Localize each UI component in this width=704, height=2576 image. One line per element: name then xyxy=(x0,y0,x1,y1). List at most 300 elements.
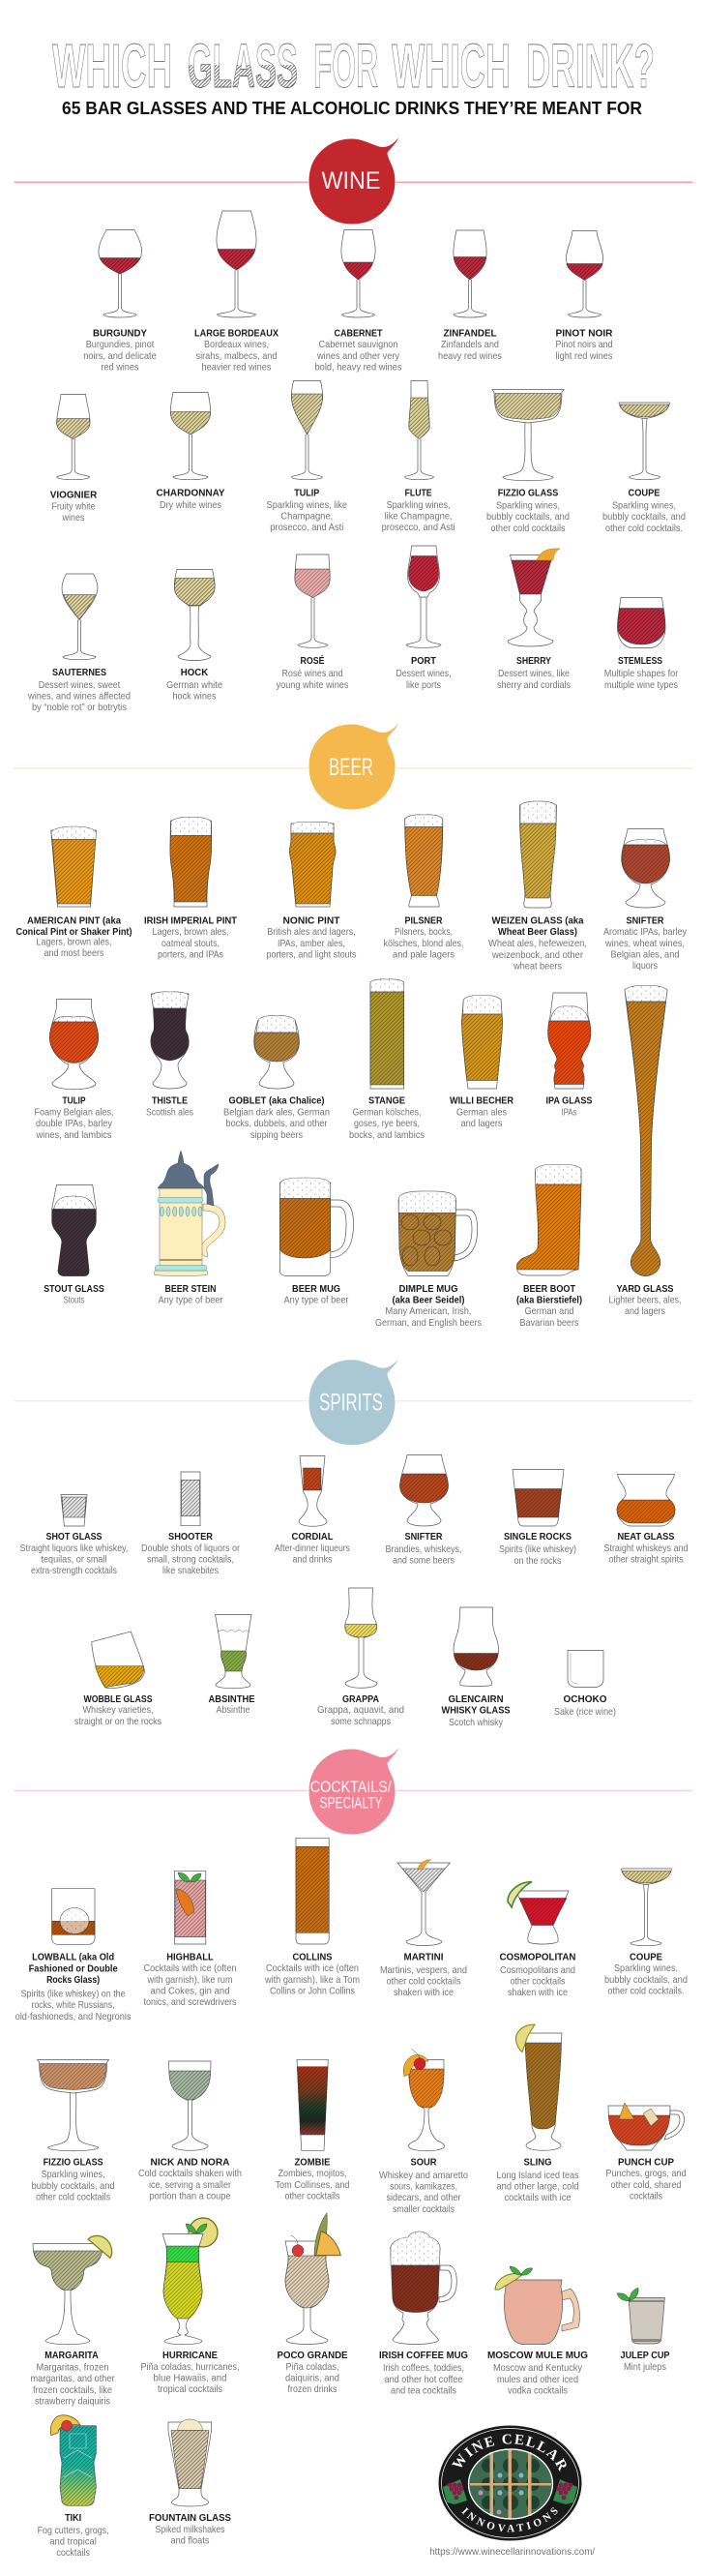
label: absinthe: Absinthe xyxy=(217,1704,250,1716)
label: ochoko: Sake (rice wine) xyxy=(554,1706,616,1718)
label: irish coffee: and other hot coffee xyxy=(385,2374,463,2385)
icon: lowball xyxy=(52,1889,95,1944)
label: snifter spirits: SNIFTER xyxy=(404,1531,443,1543)
label: american pint: Lagers, brown ales, xyxy=(37,937,112,948)
icon: nonic pint xyxy=(290,822,336,907)
label: port: PORT xyxy=(411,655,437,667)
label: viognier: wines xyxy=(62,512,85,524)
label: pinot noir: PINOT NOIR xyxy=(555,327,613,339)
label: goblet xyxy=(223,1095,330,1141)
label: collins: with garnish), like a Tom xyxy=(264,1974,360,1986)
label: fizzio: Sparkling wines, xyxy=(496,499,560,511)
label: glencairn xyxy=(441,1693,511,1728)
label: nonic pint: British ales and lagers, xyxy=(267,926,356,938)
label: stemless: multiple wine types xyxy=(604,679,678,691)
label: willi becher: German ales xyxy=(456,1107,507,1119)
icon: tiki xyxy=(50,2415,96,2505)
label: yard glass: and lagers xyxy=(625,1305,665,1317)
label: fizzio: bubbly cocktails, and xyxy=(486,511,570,523)
title: WHICH xyxy=(392,31,511,101)
logo: wine cellar innovations xyxy=(439,2425,582,2541)
url: https://www.winecellarinnovations.com/ xyxy=(429,2546,595,2558)
label: margarita: frozen cocktails, like xyxy=(33,2384,112,2396)
label: irish imperial pint: porters, and IPAs xyxy=(158,948,223,960)
label: pilsner: kölsches, blond ales, xyxy=(383,938,464,949)
glass card: tulip wine xyxy=(267,381,347,533)
label: snifter spirits: Brandies, whiskeys, xyxy=(385,1543,462,1555)
label: collins: Cocktails with ice (often xyxy=(266,1962,359,1974)
glass card: yard glass xyxy=(609,985,681,1317)
label: stemless xyxy=(604,655,679,691)
label: zinfandel: Zinfandels and xyxy=(441,339,499,350)
label: hock: German white xyxy=(166,679,222,691)
glass card: single rocks xyxy=(499,1469,576,1567)
icon: thistle xyxy=(151,992,189,1089)
label: flute xyxy=(382,488,455,533)
label: irish imperial pint: IRISH IMPERIAL PINT xyxy=(144,914,238,926)
label: margarita: Margaritas, frozen xyxy=(37,2361,109,2373)
icon: glencairn xyxy=(454,1607,498,1686)
glass card: coupe xyxy=(602,403,686,534)
glass card: lowball xyxy=(15,1889,132,2022)
icon: wobble glass xyxy=(92,1632,144,1688)
label: zombie: Tom Collinses, and xyxy=(275,2179,350,2191)
label: glencairn: GLENCAIRN xyxy=(449,1693,503,1705)
label: weizen: WEIZEN GLASS (aka xyxy=(491,914,584,926)
label: single rocks: on the rocks xyxy=(514,1555,561,1567)
label: zombie: ZOMBIE xyxy=(294,2157,331,2169)
icon: martini xyxy=(397,1860,450,1945)
label: beer mug: BEER MUG xyxy=(292,1283,340,1295)
glass card: margarita xyxy=(31,2235,115,2408)
label: chardonnay xyxy=(157,488,224,511)
label: hurricane: HURRICANE xyxy=(162,2350,218,2361)
label: american pint: Conical Pint or Shaker Pint) xyxy=(15,926,132,938)
icon: snifter beer xyxy=(622,828,670,908)
label: american pint: AMERICAN PINT (aka xyxy=(27,914,121,926)
label: moscow mule xyxy=(487,2350,588,2396)
icon: irish imperial pint xyxy=(170,817,212,907)
icon: fountain glass xyxy=(168,2419,211,2506)
glass card: martini xyxy=(380,1860,467,1998)
heading bubble: wine xyxy=(308,135,399,225)
icon: shooter xyxy=(181,1472,200,1526)
label: weizen: Wheat ales, hefeweizen, xyxy=(488,938,587,949)
label: snifter beer: SNIFTER xyxy=(627,914,664,926)
label: martini: shaken with ice xyxy=(394,1987,454,1998)
label: tulip beer: double IPAs, barley xyxy=(36,1118,113,1129)
label: shot glass: extra-strength cocktails xyxy=(31,1565,117,1576)
label: sour: Whiskey and amaretto xyxy=(379,2170,468,2181)
label: wobble glass: WOBBLE GLASS xyxy=(83,1693,153,1705)
label: beer boot: (aka Bierstiefel) xyxy=(516,1295,582,1306)
label: nonic pint: porters, and light stouts xyxy=(267,948,356,960)
label: highball: tonics, and screwdrivers xyxy=(143,1996,236,2008)
label: ochoko xyxy=(554,1693,616,1718)
glass card: moscow mule xyxy=(487,2266,588,2396)
icon: dimple mug xyxy=(398,1191,478,1275)
label: ipa: IPA GLASS xyxy=(545,1095,592,1107)
label: weizen: wheat beers xyxy=(513,960,562,972)
glass card: fizzio cocktail xyxy=(32,2059,115,2202)
label: shooter xyxy=(141,1531,240,1576)
icon: pinot noir glass xyxy=(566,230,603,317)
label: shot glass: Straight liquors like whiskey, xyxy=(19,1543,128,1554)
label: grappa xyxy=(317,1693,404,1727)
glass card: irish imperial pint xyxy=(144,817,238,960)
glass card: goblet xyxy=(223,1016,330,1141)
label: fizzio cocktail xyxy=(32,2157,115,2202)
glass card: grappa xyxy=(317,1588,404,1727)
label: fizzio cocktail: other cold cocktails xyxy=(36,2191,110,2202)
label: poco grande: daiquiris, and xyxy=(285,2373,339,2384)
label: punch cup: Punches, grogs, and xyxy=(605,2168,687,2179)
label: neat glass: Straight whiskeys and xyxy=(603,1543,689,1554)
label: irish coffee xyxy=(379,2350,468,2396)
glass card: sling xyxy=(497,2024,579,2203)
label: grappa: some schnapps xyxy=(331,1716,391,1727)
icon: goblet xyxy=(254,1016,299,1089)
icon: zombie xyxy=(297,2059,328,2150)
glass card: julep cup xyxy=(617,2288,669,2373)
label: pilsner: Pilsners, bocks, xyxy=(395,926,453,938)
glass card: willi becher xyxy=(450,995,513,1129)
glass card: stout xyxy=(44,1184,104,1306)
glass card: zombie xyxy=(275,2059,350,2202)
label: tulip wine: Sparkling wines, like xyxy=(267,499,347,511)
label: highball xyxy=(143,1952,237,2008)
label: margarita: MARGARITA xyxy=(44,2350,99,2361)
icon: hock glass xyxy=(174,569,215,660)
glass card: beer stein xyxy=(155,1151,225,1306)
label: nick and nora: portion than a coupe xyxy=(149,2191,231,2202)
label: highball: Cocktails with ice (often xyxy=(143,1962,237,1974)
label: beer mug xyxy=(284,1283,349,1306)
icon: poco grande xyxy=(285,2213,340,2344)
glass card: large bordeaux xyxy=(194,211,279,374)
label: cordial: After-dinner liqueurs xyxy=(275,1543,350,1554)
label: tiki: TIKI xyxy=(65,2512,81,2524)
icon: ochoko xyxy=(568,1651,603,1688)
glass card: snifter beer xyxy=(603,828,688,972)
heading bubble: beer xyxy=(308,721,399,810)
label: beer boot: BEER BOOT xyxy=(523,1283,576,1295)
label: nick and nora: NICK AND NORA xyxy=(151,2157,230,2169)
label: cordial: CORDIAL xyxy=(292,1531,334,1543)
label: irish imperial pint: Lagers, brown ales, xyxy=(153,926,228,938)
label: thistle xyxy=(146,1095,193,1119)
label: rose: Rosé wines and xyxy=(282,668,343,679)
label: cabernet: bold, heavy red wines xyxy=(315,362,402,374)
label: irish coffee: IRISH COFFEE MUG xyxy=(379,2350,468,2361)
label: snifter beer: Aromatic IPAs, barley xyxy=(603,926,688,938)
section: cocktails xyxy=(14,1746,692,1835)
label: cabernet xyxy=(315,327,402,374)
icon: tulip wine glass xyxy=(291,381,323,480)
label: stange: bocks, and lambics xyxy=(349,1129,425,1141)
glass card: neat glass xyxy=(603,1475,689,1566)
label: collins xyxy=(264,1952,360,1997)
label: martini xyxy=(380,1952,467,1998)
label: flute: like Champagne, xyxy=(385,511,453,523)
label: burgundy: Burgundies, pinot xyxy=(86,339,154,350)
label: coupe xyxy=(602,488,686,534)
label: snifter beer: liquors xyxy=(632,960,658,972)
label: stange: German kölsches, xyxy=(352,1107,422,1119)
glass card: highball xyxy=(143,1871,237,2008)
icon: coupe cocktail xyxy=(622,1869,671,1946)
icon: nick and nora xyxy=(168,2061,211,2150)
label: fizzio: FIZZIO GLASS xyxy=(498,488,558,499)
icon: single rocks xyxy=(513,1469,564,1526)
glass card: pilsner xyxy=(383,815,464,960)
label: coupe cocktail xyxy=(604,1952,688,1997)
label: cosmopolitan: shaken with ice xyxy=(508,1987,568,1998)
label: tulip beer: Foamy Belgian ales, xyxy=(35,1107,114,1119)
label: moscow mule: mules and other iced xyxy=(497,2374,578,2385)
label: fizzio cocktail: bubbly cocktails, and xyxy=(32,2180,115,2192)
label: tiki: Fog cutters, grogs, xyxy=(38,2525,109,2536)
title xyxy=(52,43,654,88)
glass card: zinfandel xyxy=(438,230,502,362)
label: zombie: other cocktails xyxy=(284,2191,340,2202)
label: port xyxy=(396,655,451,691)
glass card: weizen xyxy=(488,801,587,972)
label: large bordeaux: Bordeaux wines, xyxy=(204,339,269,350)
label: fountain: and floats xyxy=(170,2535,209,2547)
glass card: cosmopolitan xyxy=(499,1881,576,1998)
label: lowball: Fashioned or Double xyxy=(29,1962,118,1974)
label: lowball: rocks, white Russians, xyxy=(32,1999,115,2011)
glass card: punch cup xyxy=(605,2103,687,2202)
label: cordial xyxy=(275,1531,350,1566)
label: coupe cocktail: bubbly cocktails, and xyxy=(604,1974,688,1986)
label: beer mug: Any type of beer xyxy=(284,1295,349,1306)
glass card: rose xyxy=(277,554,348,691)
label: julep cup: Mint juleps xyxy=(624,2361,666,2373)
label: tulip beer xyxy=(35,1095,114,1141)
label: shooter: SHOOTER xyxy=(168,1531,213,1543)
icon: moscow mule mug xyxy=(495,2266,579,2344)
label: lowball: LOWBALL (aka Old xyxy=(32,1952,114,1963)
label: sherry xyxy=(497,655,571,691)
glass card: thistle xyxy=(146,992,193,1119)
label: beer stein xyxy=(159,1283,223,1306)
label: punch cup: PUNCH CUP xyxy=(618,2157,674,2169)
label: large bordeaux: LARGE BORDEAUX xyxy=(194,327,279,339)
glass card: tulip beer xyxy=(35,999,114,1141)
label: cosmopolitan: COSMOPOLITAN xyxy=(499,1952,576,1963)
label: nick and nora xyxy=(138,2157,242,2202)
label: glencairn: WHISKY GLASS xyxy=(441,1705,511,1717)
icon: cordial xyxy=(299,1455,327,1526)
heading bubble: cocktails/specialty: SPECIALTY xyxy=(319,1794,383,1812)
logo: wine cellar innovations: WINE CELLAR xyxy=(452,2435,567,2471)
label: large bordeaux: sirahs, malbecs, and xyxy=(195,350,278,362)
label: nonic pint: NONIC PINT xyxy=(282,914,340,926)
label: beer stein: Any type of beer xyxy=(159,1295,223,1306)
glass card: chardonnay xyxy=(157,393,224,511)
label: neat glass: NEAT GLASS xyxy=(617,1531,675,1543)
label: coupe cocktail: Sparkling wines, xyxy=(614,1962,678,1974)
icon: punch cup xyxy=(608,2103,685,2150)
icon: port glass xyxy=(406,546,441,647)
label: absinthe: ABSINTHE xyxy=(209,1693,255,1705)
icon: julep cup xyxy=(617,2288,664,2344)
heading bubble: spirits xyxy=(308,1357,399,1446)
label: stange xyxy=(349,1095,425,1141)
label: pinot noir xyxy=(555,327,613,362)
label: julep cup xyxy=(621,2350,669,2373)
glass card: stange xyxy=(349,979,425,1141)
label: poco grande: frozen drinks xyxy=(288,2383,337,2395)
logo: wine cellar innovations: INNOVATIONS xyxy=(461,2507,557,2531)
label: sherry: SHERRY xyxy=(516,655,551,667)
label: fizzio cocktail: Sparkling wines, xyxy=(42,2169,105,2180)
label: single rocks xyxy=(499,1531,576,1567)
icon: fizzio glass xyxy=(492,389,564,481)
label: rose xyxy=(277,654,348,691)
icon: beer boot xyxy=(516,1164,581,1275)
label: hurricane xyxy=(141,2350,240,2395)
label: snifter beer: wines, wheat wines, xyxy=(604,938,685,949)
label: hock xyxy=(166,667,222,703)
glass card: absinthe xyxy=(209,1614,255,1716)
label: highball: HIGHBALL xyxy=(166,1952,214,1963)
glass card: cordial xyxy=(275,1455,350,1566)
label: american pint: and most beers xyxy=(44,947,104,959)
icon: coupe glass xyxy=(619,403,669,480)
label: tulip wine: TULIP xyxy=(294,488,319,499)
icon: sling xyxy=(515,2024,562,2150)
icon: cabernet glass xyxy=(341,230,375,317)
icon: margarita xyxy=(33,2235,112,2345)
label: dimple mug: DIMPLE MUG xyxy=(398,1283,458,1295)
label: flute: Sparkling wines, xyxy=(387,499,451,511)
label: stout xyxy=(44,1283,104,1306)
heading bubble: beer: BEER xyxy=(329,754,373,781)
icon: viognier glass xyxy=(57,395,90,480)
label: dimple mug xyxy=(375,1283,482,1329)
label: shot glass: tequilas, or small xyxy=(41,1554,106,1566)
label: sherry: sherry and cordials xyxy=(497,679,571,691)
label: viognier xyxy=(50,490,98,524)
label: shooter: like snakebites xyxy=(162,1565,219,1576)
label: cosmopolitan: other cocktails xyxy=(511,1976,565,1988)
icon: neat glass xyxy=(617,1475,675,1526)
label: snifter spirits: and some beers xyxy=(393,1554,455,1566)
label: punch cup: other cold, shared xyxy=(611,2179,682,2191)
label: stemless: STEMLESS xyxy=(618,655,662,667)
icon: stout glass xyxy=(52,1184,96,1275)
label: lowball: old-fashioneds, and Negronis xyxy=(15,2011,132,2022)
title: GLASS xyxy=(188,31,298,101)
glass card: tiki xyxy=(38,2415,109,2559)
title: WHICH xyxy=(52,31,172,101)
glass card: wobble glass xyxy=(74,1632,161,1727)
label: martini: Martinis, vespers, and xyxy=(380,1964,467,1976)
glass card: pinot noir xyxy=(555,230,613,362)
label: sour xyxy=(379,2157,468,2215)
label: willi becher: WILLI BECHER xyxy=(450,1095,513,1107)
label: punch cup xyxy=(605,2157,687,2202)
glass card: sherry xyxy=(497,549,571,691)
glass card: hurricane xyxy=(141,2218,240,2395)
section: spirits xyxy=(14,1357,692,1446)
label: burgundy: red wines xyxy=(101,362,139,374)
label: coupe: COUPE xyxy=(629,488,660,499)
glass card: stemless xyxy=(604,598,679,691)
label: fountain: FOUNTAIN GLASS xyxy=(149,2512,231,2524)
label: irish imperial pint xyxy=(144,914,238,960)
label: large bordeaux xyxy=(194,327,279,374)
label: zombie xyxy=(275,2157,350,2202)
icon: flute glass xyxy=(404,381,433,480)
label: cabernet: Cabernet sauvignon xyxy=(319,339,398,350)
label: tulip beer: TULIP xyxy=(62,1095,85,1107)
label: thistle: THISTLE xyxy=(152,1095,188,1107)
icon: burgundy glass xyxy=(99,230,142,317)
glass card: burgundy xyxy=(83,230,157,374)
glass card: snifter spirits xyxy=(385,1455,462,1566)
glass card: irish coffee xyxy=(379,2232,468,2396)
glass card: hock xyxy=(166,569,222,703)
glass card: sour xyxy=(379,2049,468,2215)
title: GLASS xyxy=(188,31,298,101)
label: sling xyxy=(497,2157,579,2203)
label: fountain: Spiked milkshakes xyxy=(155,2524,224,2535)
label: moscow mule: Moscow and Kentucky xyxy=(493,2362,583,2374)
label: ochoko: OCHOKO xyxy=(563,1693,607,1705)
label: flute: prosecco, and Asti xyxy=(382,522,455,533)
label: tiki: and tropical xyxy=(49,2535,97,2547)
glass card: dimple mug xyxy=(375,1191,482,1329)
label: single rocks: SINGLE ROCKS xyxy=(504,1531,572,1543)
glass card: american pint xyxy=(15,826,132,959)
label: port: like ports xyxy=(406,679,441,691)
icon: chardonnay glass xyxy=(170,393,211,480)
glass card: beer boot xyxy=(516,1164,582,1329)
icon: highball xyxy=(175,1871,206,1944)
icon: cosmopolitan xyxy=(508,1881,569,1944)
label: stemless: Multiple shapes for xyxy=(604,668,679,679)
label: hock: hock wines xyxy=(172,691,217,703)
label: rose: ROSÉ xyxy=(300,654,325,667)
icon: zinfandel glass xyxy=(454,230,486,317)
section: beer xyxy=(14,721,692,810)
label: moscow mule: MOSCOW MULE MUG xyxy=(487,2350,588,2361)
icon: sauternes glass xyxy=(62,574,98,660)
label: large bordeaux: heavier red wines xyxy=(201,362,271,374)
label: irish coffee: Irish coffees, toddies, xyxy=(383,2362,464,2374)
label: irish imperial pint: oatmeal stouts, xyxy=(161,938,220,949)
label: lowball: Rocks Glass) xyxy=(46,1974,100,1986)
icon: sherry glass xyxy=(508,549,560,646)
label: poco grande: POCO GRANDE xyxy=(277,2350,348,2361)
icon: american pint xyxy=(51,826,97,907)
glass card: ipa xyxy=(545,993,592,1119)
label: snifter beer: Belgian ales, and xyxy=(611,948,680,960)
label: margarita: margaritas, and other xyxy=(31,2373,115,2384)
label: tulip wine: Champagne, xyxy=(280,511,333,523)
label: port: Dessert wines, xyxy=(396,668,451,679)
glass card: ochoko xyxy=(554,1651,616,1718)
label: punch cup: cocktails xyxy=(630,2191,662,2202)
label: zinfandel: heavy red wines xyxy=(438,350,502,362)
icon: willi becher xyxy=(462,995,503,1089)
glass card: flute xyxy=(382,381,455,533)
label: shooter: small, strong cocktails, xyxy=(147,1554,234,1566)
